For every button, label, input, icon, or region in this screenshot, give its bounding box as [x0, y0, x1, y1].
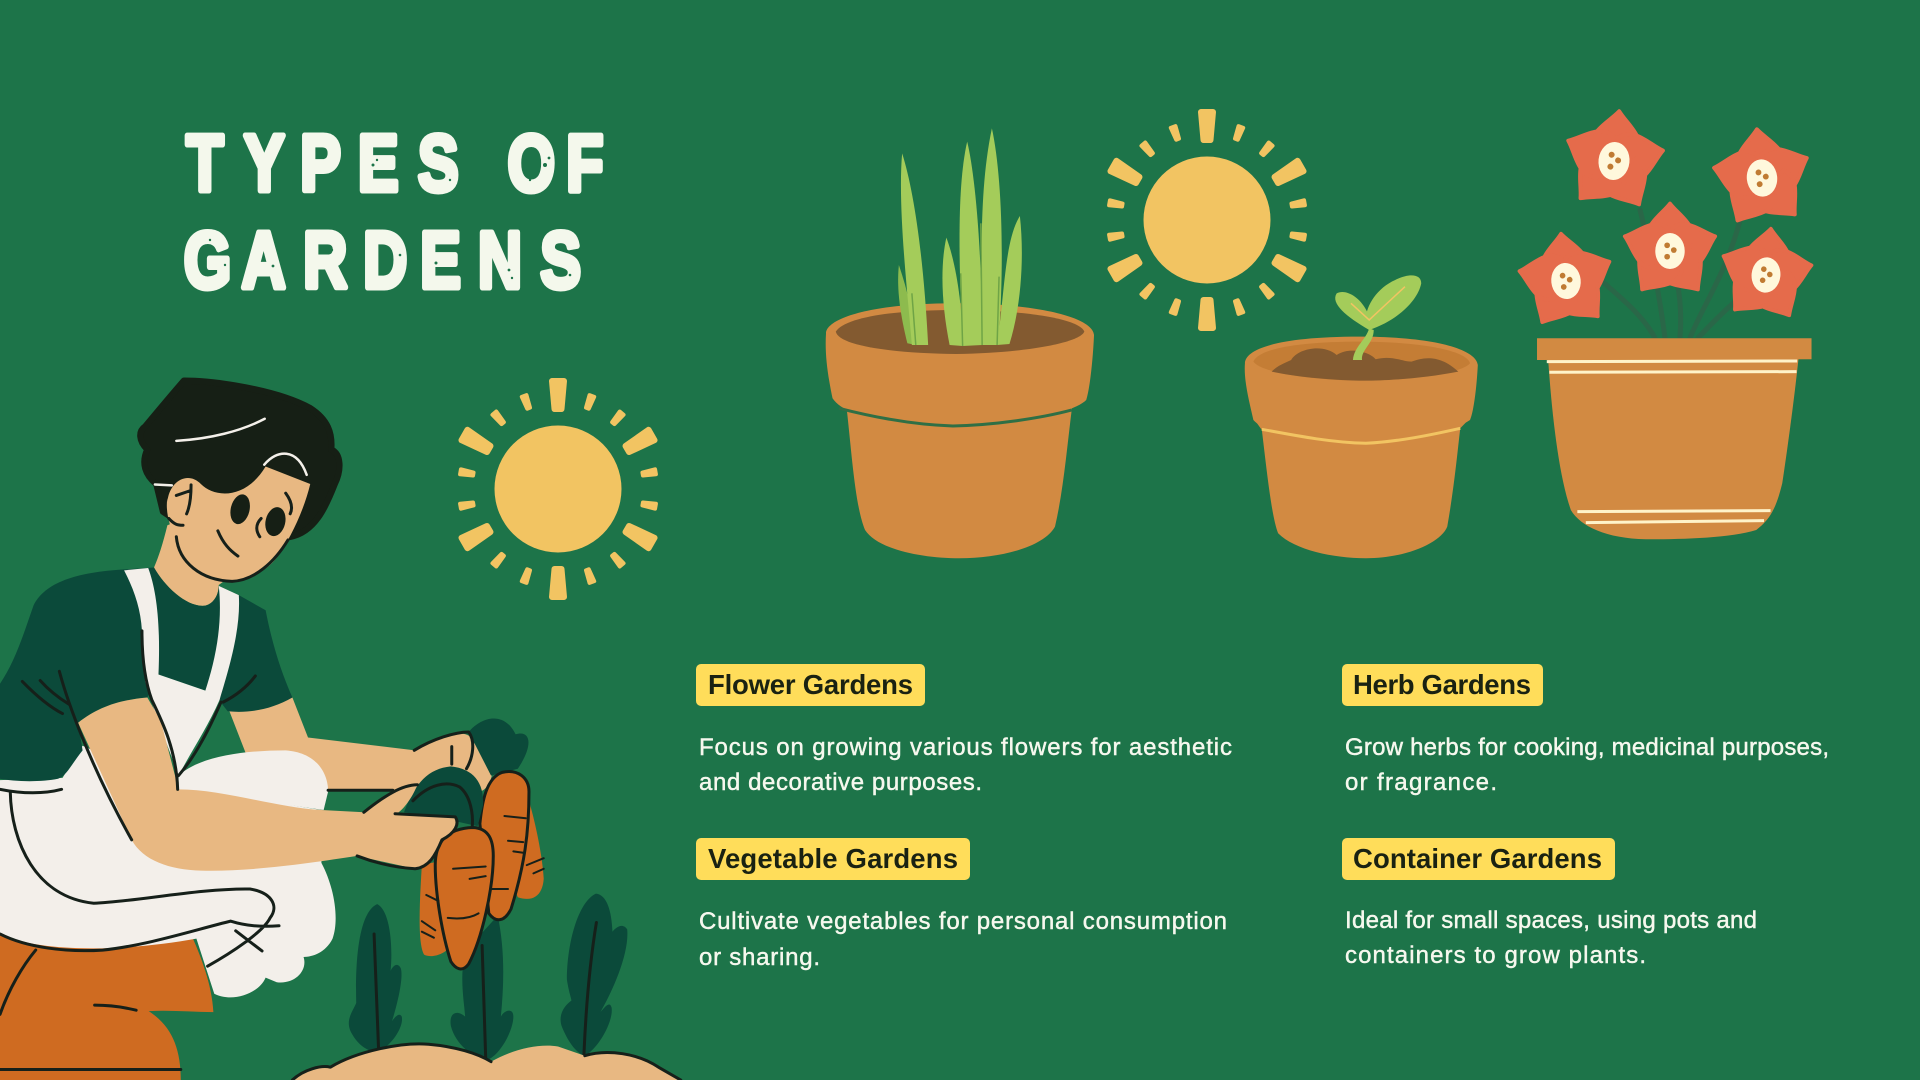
shirt [0, 568, 292, 781]
label [1342, 838, 1615, 880]
label: Vegetable Gardens [708, 843, 958, 874]
hair [140, 381, 339, 539]
description: and decorative purposes. [699, 769, 982, 796]
apron bib and straps [124, 568, 239, 776]
rear carrots [420, 801, 544, 956]
description: or fragrance. [1345, 769, 1497, 796]
label: Herb Gardens [1353, 669, 1531, 700]
label [696, 838, 970, 880]
apron skirt [0, 746, 336, 997]
neck [154, 521, 250, 606]
card: flower gardens [696, 664, 1232, 796]
ground plants [349, 894, 627, 1060]
description: Focus on growing various flowers for aesthetic [699, 734, 1232, 761]
description: Cultivate vegetables for personal consumption [699, 908, 1227, 935]
label [1342, 664, 1543, 706]
pot with grass blades [826, 128, 1094, 558]
label [696, 664, 925, 706]
illustration: gardener harvesting carrots [0, 381, 681, 1080]
front carrots [480, 772, 529, 920]
description: Ideal for small spaces, using pots and [1345, 907, 1757, 934]
facial features [228, 492, 288, 538]
flowers [1509, 106, 1822, 338]
description: Grow herbs for cooking, medicinal purposes, [1345, 734, 1829, 761]
flower stems [1590, 200, 1750, 338]
description: containers to grow plants. [1345, 942, 1646, 969]
pot with sprout [1245, 275, 1478, 558]
far arm [228, 698, 493, 810]
description: or sharing. [699, 944, 820, 971]
title [184, 120, 603, 306]
outline strokes [0, 631, 473, 966]
pot with flowers [1537, 338, 1812, 539]
face [167, 467, 310, 581]
soil mound [292, 1044, 681, 1080]
card: herb gardens [1342, 664, 1829, 796]
near arm [78, 698, 457, 871]
card: vegetable gardens [696, 838, 1227, 971]
carrot leaves, back [469, 718, 528, 776]
label: Flower Gardens [708, 669, 913, 700]
hair highlights [155, 419, 307, 485]
card: container gardens [1342, 838, 1757, 969]
title: GARDENS [184, 217, 581, 306]
label: Container Gardens [1353, 843, 1602, 874]
title: TYPES OF [186, 120, 603, 209]
description [699, 908, 1227, 971]
description [699, 734, 1232, 796]
icon: sun left [460, 381, 656, 597]
description [1345, 907, 1757, 969]
icon: sun top [1109, 112, 1305, 328]
carrot leaves in hand [404, 766, 483, 826]
trousers [0, 934, 213, 1080]
description [1345, 734, 1829, 796]
